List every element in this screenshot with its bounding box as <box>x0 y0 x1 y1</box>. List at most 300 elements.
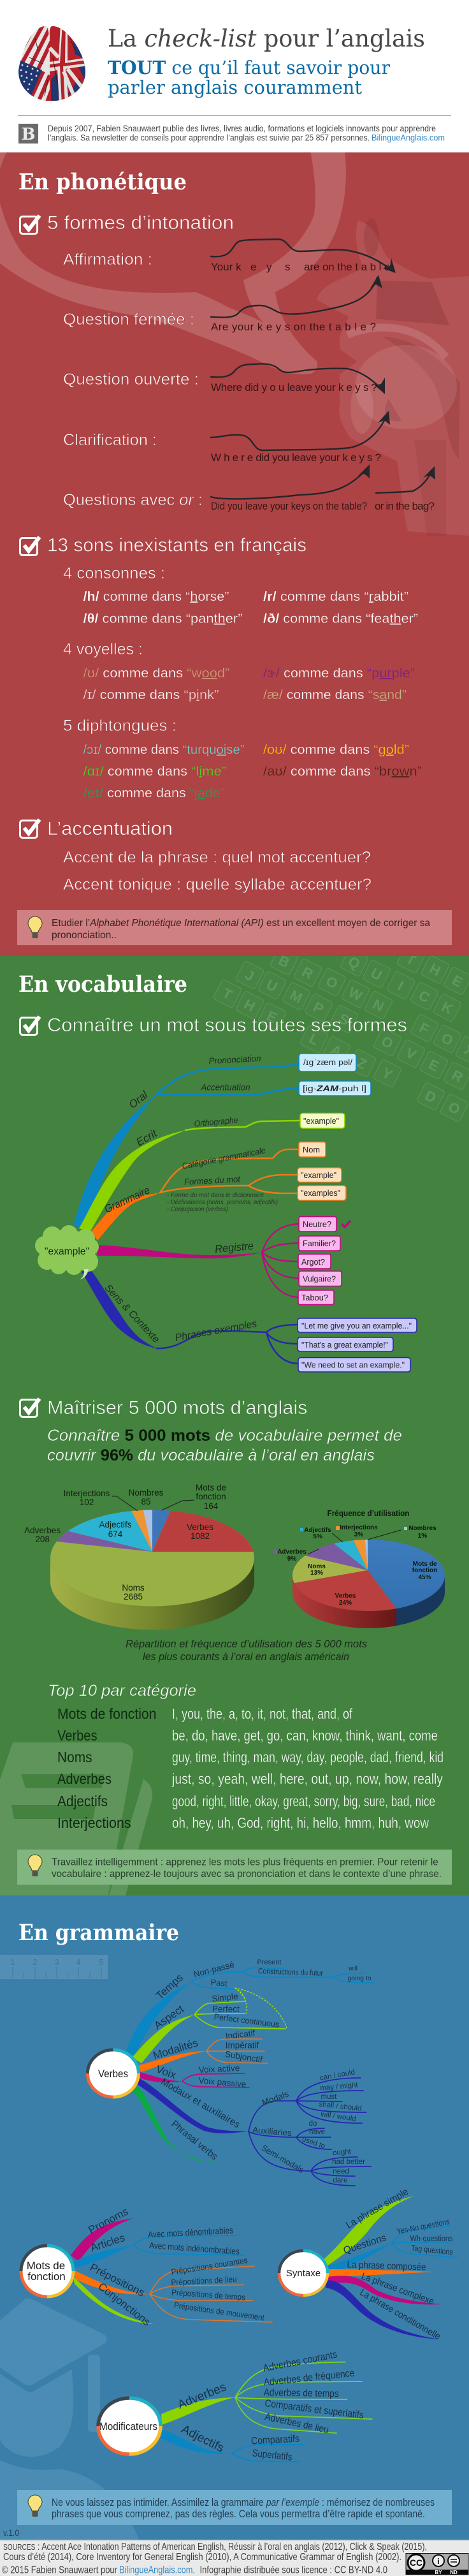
scrabble tiles watermark: L <box>307 1030 321 1049</box>
consonnes: /ð/ comme dans “fea ther” <box>263 612 418 626</box>
pie chart: word distribution: Verbes <box>187 1522 213 1532</box>
intonation: question ouverte <box>63 364 385 394</box>
node: Verbes <box>87 2050 138 2097</box>
pie chart: word distribution: 102 <box>80 1498 94 1507</box>
checklist item: sons inexistants: 13 sons inexistants en français <box>47 534 307 556</box>
node: Modificateurs: Modificateurs <box>99 2420 157 2432</box>
author blurb: BilingueAnglais.com <box>372 133 445 143</box>
branch: aspect: Perfect continuous <box>213 2012 280 2029</box>
pie chart: word distribution: Adverbes <box>24 1526 61 1535</box>
intonation: affirmation: s <box>285 261 291 273</box>
branch: modaux et auxiliaires: dare <box>333 2177 348 2184</box>
mind map: syntaxe <box>279 2186 458 2342</box>
icon: creative commons badge <box>406 2554 468 2575</box>
branch: registre: Registre <box>214 1240 254 1255</box>
pie chart: usage frequency: 3% <box>354 1531 363 1538</box>
branch: grammaire: Nom <box>303 1145 320 1154</box>
coverage statement: Connaître 5 000 mots de vocabulaire permet de <box>47 1427 402 1445</box>
voyelles: /ɝ/ comme dans “purple” <box>263 666 415 681</box>
branch: oral: [ig- ZAM -puh l] <box>303 1084 366 1093</box>
branch: sens et contexte <box>82 1269 417 1372</box>
voyelles: /ɪ/ comme dans “pink” <box>83 688 219 702</box>
consonnes: /h/ comme dans “ horse” <box>83 590 229 604</box>
ruler watermark <box>0 1955 108 1979</box>
scrabble tiles watermark: Q <box>345 953 363 972</box>
voyelles: /ʊ/ comme dans “wood” <box>83 666 229 681</box>
top 10 table: Noms <box>57 1749 92 1765</box>
mind map: syntaxe: La phrase conditionnelle <box>358 2287 442 2342</box>
pie chart: word distribution: Nombres <box>129 1488 164 1498</box>
branch: aspect: Perfect <box>212 2004 240 2014</box>
mind map: modificateurs: Superlatifs <box>252 2448 292 2463</box>
pie chart: word distribution <box>24 1484 254 1630</box>
mind map: syntaxe: Questions <box>342 2232 388 2256</box>
branch: modaux et auxiliaires: can / could <box>319 2068 356 2082</box>
intonation: affirmation: y <box>266 261 272 273</box>
scrabble tiles watermark: T <box>220 985 235 1003</box>
mind map: mots de fonction: Prépositions courantes <box>171 2255 249 2277</box>
scrabble tiles watermark: H <box>242 996 258 1015</box>
pie chart: word distribution: 164 <box>204 1501 219 1511</box>
mind map: modificateurs: Adverbes de lieu <box>264 2411 329 2436</box>
scrabble tiles watermark: J <box>243 967 257 984</box>
mind map: modificateurs: Adjectifs <box>179 2422 226 2455</box>
scrabble tiles watermark: C <box>416 987 433 1006</box>
pie chart: usage frequency: Adverbes <box>277 1549 307 1556</box>
top 10 table: Adverbes <box>57 1770 112 1787</box>
scrabble tiles watermark: D <box>422 1087 439 1106</box>
diphtongues: /eɪ/ comme dans “jade” <box>83 786 225 800</box>
scrabble tiles watermark: I <box>395 978 406 994</box>
top 10 table: I, you, the, a, to, it, not, that, and, of <box>172 1705 352 1722</box>
mind map: verbes <box>87 1959 374 2186</box>
speech bubble watermark <box>0 147 346 374</box>
icon: checkbox <box>20 216 40 233</box>
pie chart: word distribution: 208 <box>35 1535 50 1544</box>
top 10 heading: Top 10 par catégorie <box>48 1682 196 1700</box>
scrabble tiles watermark: U <box>368 965 385 983</box>
branch: voix: Voix active <box>198 2063 240 2075</box>
branch: modaux et auxiliaires: Modals <box>261 2089 290 2107</box>
chart caption: Répartition et fréquence d’utilisation des 5 000 mots <box>126 1638 367 1650</box>
ruler watermark: 2 <box>32 1957 38 1967</box>
mind map: modificateurs <box>98 2349 372 2463</box>
logo watermark bottom-left <box>0 1742 152 1895</box>
branch: oral: Prononciation <box>208 1054 261 1066</box>
mind map: modificateurs: Adverbes de fréquence <box>263 2368 355 2388</box>
branch: modaux et auxiliaires: Modaux et auxiliaires <box>159 2077 242 2130</box>
pie chart: word distribution: 85 <box>141 1497 151 1506</box>
mind map: word forms <box>35 1054 417 1372</box>
mind map: mots de fonction: Prépositions de temps <box>171 2287 246 2302</box>
icon: brain with American and British flags <box>18 26 85 101</box>
icon: creative commons badge: CC <box>410 2558 422 2568</box>
intonation: affirmation: are on the t a b l e. <box>304 261 393 273</box>
panel: vocabulaire <box>0 945 469 1895</box>
ruler watermark: 3 <box>54 1957 59 1967</box>
branch: voix: Voix passive <box>198 2075 247 2089</box>
scrabble tiles watermark: A <box>328 1041 345 1060</box>
branch: oral: Oral <box>126 1088 150 1111</box>
scrabble tiles watermark: O <box>438 1029 456 1049</box>
scrabble tiles watermark: T <box>403 950 419 969</box>
panel: grammaire <box>0 1895 469 2541</box>
branch: modalités: Modalités <box>152 2036 199 2062</box>
branch: registre: Neutre? <box>303 1219 331 1229</box>
callout: API tip: prononciation.. <box>52 930 117 941</box>
pie chart: word distribution: 2685 <box>124 1592 143 1601</box>
callout: vocabulary tip <box>17 1850 452 1885</box>
branch: registre: Familier? <box>303 1239 336 1248</box>
pie chart: usage frequency: Fréquence d’utilisation <box>328 1508 410 1518</box>
checklist item: accentuation: Accent de la phrase : quel mot accentuer? <box>63 848 371 866</box>
branch: sens et contexte: Sens & Contexte <box>103 1283 162 1345</box>
icon: light bulb <box>28 2495 42 2517</box>
branch: modaux et auxiliaires: Auxiliaries <box>252 2125 292 2138</box>
top 10 table: Verbes <box>57 1727 97 1744</box>
branch: registre: Tabou? <box>301 1293 328 1302</box>
heading: En grammaire <box>18 1920 179 1946</box>
branch: modalités <box>139 2028 268 2072</box>
mind map: mots de fonction: Prépositions de mouvement <box>173 2300 265 2322</box>
consonnes: /θ/ comme dans “pan ther” <box>83 612 242 626</box>
mind map: syntaxe: Yes-No questions <box>396 2217 451 2236</box>
branch: modaux et auxiliaires: ought <box>333 2148 352 2157</box>
mind map: syntaxe: La phrase composée <box>347 2259 426 2273</box>
scrabble tiles watermark: M <box>287 987 305 1006</box>
mind map: mots de fonction: Prépositions de lieu <box>171 2274 237 2287</box>
scrabble tiles watermark: E <box>426 1056 442 1075</box>
branch: registre: Argot? <box>301 1257 325 1267</box>
mind map: modificateurs: Adverbes courants <box>262 2349 338 2374</box>
checklist item: accentuation <box>20 818 372 894</box>
branch: voix <box>140 2063 249 2089</box>
branch: grammaire: Formes du mot <box>184 1174 242 1187</box>
pie chart: usage frequency: 13% <box>310 1570 323 1577</box>
diphtongues: /oʊ/ comme dans “gold” <box>263 743 409 757</box>
branch: grammaire: Catégorie grammaticale <box>181 1145 266 1171</box>
title: La check-list pour l’anglais <box>108 25 425 52</box>
intonation: question fermée <box>63 275 382 333</box>
branch: phrasal verbs <box>131 2087 220 2163</box>
mind map: syntaxe: Wh-questions <box>410 2234 452 2243</box>
scrabble tiles watermark: K <box>439 999 456 1017</box>
branch: modaux et auxiliaires: do <box>309 2120 317 2128</box>
branch: modaux et auxiliaires: will / would <box>320 2110 356 2123</box>
central cloud node <box>35 1225 99 1279</box>
pie chart: word distribution: 674 <box>108 1529 123 1539</box>
pie chart: word distribution: fonction <box>196 1492 226 1501</box>
icon: Bilingue logo: B <box>22 125 35 144</box>
checklist item: 5000 mots: Maîtriser 5 000 mots d’anglais <box>47 1397 307 1418</box>
branch: aspect: Aspect <box>152 2003 186 2032</box>
scrabble tiles watermark: N <box>370 996 387 1015</box>
branch: sens et contexte: "That's a great example!" <box>301 1340 388 1350</box>
coverage statement <box>47 1427 402 1464</box>
voyelles: /æ/ comme dans “sand” <box>263 688 407 702</box>
intonation: questions avec or: or in the bag? <box>375 500 435 512</box>
scrabble tiles watermark: Z <box>354 1054 369 1073</box>
icon: light bulb <box>28 1855 42 1876</box>
intonation: questions avec or: Did you leave your keys on the table? <box>211 500 367 512</box>
node: Verbes: Verbes <box>98 2068 128 2080</box>
branch: aspect: Simple <box>212 1991 238 2004</box>
branch: temps: going to <box>347 1975 372 1982</box>
scrabble tiles watermark: V <box>403 1045 419 1063</box>
sources: Infographie distribuée sous licence : CC BY-ND 4.0 <box>200 2565 387 2575</box>
pie chart: usage frequency <box>273 1510 445 1628</box>
icon: light bulb <box>28 916 42 938</box>
pie chart: usage frequency: 45% <box>418 1574 431 1581</box>
anatomy watermark: head cross-section <box>317 218 469 536</box>
pie chart: usage frequency: 9% <box>287 1556 296 1563</box>
scrabble tiles watermark: E <box>264 1008 280 1026</box>
branch: modaux et auxiliaires: Semi-modals <box>260 2143 305 2175</box>
branch: sens et contexte: "We need to set an example." <box>301 1360 405 1370</box>
diphtongues: /ɑɪ/ comme dans “lime” <box>83 765 226 779</box>
mind map: mots de fonction: Avec mots indénombrables <box>149 2240 240 2256</box>
branch: grammaire: Grammaire <box>103 1184 152 1216</box>
intonation: affirmation <box>63 239 396 273</box>
pie chart: word distribution: 1082 <box>191 1531 210 1541</box>
node: Syntaxe <box>279 2251 328 2295</box>
scrabble tiles watermark: B <box>276 952 292 971</box>
icon: creative commons badge: i <box>437 2557 440 2566</box>
header panel <box>18 26 451 144</box>
intonation: questions avec or: Questions avec or : <box>63 491 203 509</box>
branch: temps <box>126 1959 374 2056</box>
footer <box>0 2540 469 2576</box>
diphtongues <box>63 717 422 800</box>
author blurb: l’anglais. Sa newsletter de conseils pour apprendre l’anglais est suivie par 25 857 personnes. <box>48 133 370 143</box>
node: Mots de fonction: Mots de <box>27 2260 65 2272</box>
branch: sens et contexte: "Let me give you an example..." <box>301 1321 412 1330</box>
branch: grammaire: "examples" <box>301 1188 340 1198</box>
branch: écrit <box>79 1114 345 1232</box>
mind map: syntaxe: La phrase simple <box>344 2186 410 2231</box>
central cloud node: "example" <box>45 1246 89 1257</box>
callout: grammar tip: Ne vous laissez pas intimider. Assimilez la grammaire par l’exemple : mémorisez de nombreuses <box>52 2496 435 2508</box>
panel: phonétique <box>0 147 469 956</box>
icon: creative commons badge: ND <box>450 2570 458 2575</box>
callout: API tip: Etudier l’Alphabet Phonétique International (API) est un excellent moyen de corriger sa <box>52 918 430 929</box>
scrabble tiles watermark: U <box>264 976 280 995</box>
scrabble tiles watermark: F <box>417 1019 431 1038</box>
branch: voix: Voix <box>154 2063 178 2082</box>
branch: modaux et auxiliaires: shall / should <box>319 2101 362 2112</box>
branch: oral: /ɪɡˈzæm pəl/ <box>303 1057 352 1067</box>
scrabble tiles watermark: Y <box>380 1064 395 1083</box>
branch: temps: Temps <box>154 1971 185 2002</box>
mind map: mots de fonction: Prépositions <box>88 2261 147 2299</box>
branch: modaux et auxiliaires: have <box>309 2128 325 2136</box>
branch: modaux et auxiliaires: had better <box>332 2158 365 2166</box>
pie chart: usage frequency: 24% <box>339 1600 352 1607</box>
mind map: syntaxe: Tag questions <box>410 2244 454 2256</box>
ruler watermark: 5 <box>99 1957 104 1967</box>
callout: vocabulary tip: Travaillez intelligemment : apprenez les mots les plus fréquents en premier. Pour retenir le <box>52 1857 438 1867</box>
scrabble tiles watermark: R <box>449 1067 466 1086</box>
scrabble tiles watermark: R <box>299 964 316 982</box>
subtitle: TOUT ce qu’il faut savoir pour <box>108 57 390 78</box>
mind map: syntaxe: La phrase complexe <box>360 2271 435 2307</box>
branch: grammaire <box>91 1142 346 1240</box>
checklist item: intonation: 5 formes d’intonation <box>47 212 234 233</box>
branch: aspect <box>132 1988 287 2063</box>
intonation: affirmation: Affirmation : <box>63 251 152 269</box>
chart caption <box>126 1638 367 1663</box>
scrabble tiles watermark: O <box>323 973 340 992</box>
icon: checkbox <box>20 1017 40 1034</box>
scrabble tiles watermark: W <box>346 984 365 1004</box>
pie chart: usage frequency: Mots de <box>413 1561 437 1568</box>
pie chart: usage frequency: Adjectifs <box>304 1527 331 1534</box>
author blurb <box>48 124 445 143</box>
intonation: question ouverte: Where did y o u leave your k e y s ? <box>211 381 377 394</box>
version: v.1.0 <box>3 2528 19 2538</box>
mind map: modificateurs: Comparatifs et superlatifs <box>264 2398 364 2421</box>
branch: modaux et auxiliaires: need <box>333 2168 349 2175</box>
mind map: modificateurs: Adverbes <box>176 2380 228 2412</box>
graduate watermark <box>0 2299 139 2540</box>
branch: modaux et auxiliaires: used to <box>301 2135 326 2151</box>
branch: modalités: Indicatif <box>225 2028 256 2041</box>
mind map: modificateurs: Comparatifs <box>251 2434 299 2447</box>
consonnes: 4 consonnes : <box>63 564 165 582</box>
pie chart: usage frequency: Verbes <box>335 1593 356 1600</box>
callout: vocabulary tip: vocabulaire : apprenez-le toujours avec sa prononciation et dans le contexte d’une phrase. <box>52 1869 442 1880</box>
pie chart: word distribution: Mots de <box>196 1483 226 1492</box>
voyelles <box>63 640 415 702</box>
diphtongues: /ɔɪ/ comme dans “turquoise” <box>83 743 244 757</box>
chart caption: les plus courants à l’oral en anglais américain <box>143 1651 349 1663</box>
branch: grammaire: - Déclinaisons (noms, pronoms, adjectifs) <box>167 1198 278 1206</box>
mind map: mots de fonction: Conjonctions <box>96 2280 153 2329</box>
pie chart: usage frequency: Nombres <box>408 1525 437 1532</box>
top 10 table: Adjectifs <box>57 1793 108 1809</box>
mind map: mots de fonction: Pronoms <box>87 2205 130 2236</box>
mind map: mots de fonction <box>21 2205 272 2329</box>
intonation: question ouverte: Question ouverte : <box>63 371 199 388</box>
intonation: affirmation: e <box>250 261 256 273</box>
pie chart: usage frequency: 5% <box>313 1533 322 1540</box>
scrabble tiles watermark: O <box>379 1033 396 1052</box>
icon: checkbox <box>20 1399 40 1417</box>
scrabble tiles watermark <box>213 945 469 1122</box>
branch: oral <box>73 1054 371 1228</box>
intonation: affirmation: Your k <box>211 261 242 273</box>
sources: BilingueAnglais.com. <box>119 2565 195 2575</box>
voyelles: 4 voyelles : <box>63 640 143 658</box>
scrabble tiles watermark: O <box>445 1098 463 1117</box>
header panel: parler anglais couramment <box>108 77 362 98</box>
branch: phrasal verbs: Phrasal verbs <box>169 2119 220 2162</box>
node: Modificateurs <box>98 2398 161 2454</box>
branch: oral: Accentuation <box>201 1083 250 1092</box>
pie chart: word distribution: Interjections <box>64 1489 110 1498</box>
branch: grammaire: - Conjugaison (verbes) <box>167 1205 228 1213</box>
scrabble tiles watermark: E <box>450 972 465 990</box>
ruler watermark: 4 <box>76 1957 81 1967</box>
branch: grammaire: "example" <box>301 1170 336 1180</box>
consonnes <box>63 564 418 626</box>
intonation: questions avec or <box>63 464 435 512</box>
branch: modaux et auxiliaires <box>137 2068 371 2186</box>
checklist item: accentuation: Accent tonique : quelle syllabe accentuer? <box>63 876 372 894</box>
node: Syntaxe: Syntaxe <box>286 2268 321 2279</box>
node: Mots de fonction: fonction <box>27 2271 66 2283</box>
branch: écrit: "example" <box>303 1116 339 1126</box>
branch: temps: Constructions du futur <box>258 1966 323 1978</box>
diphtongues: /aʊ/ comme dans “brown” <box>263 765 422 779</box>
pie chart: word distribution: Adjectifs <box>99 1520 132 1529</box>
icon: checkbox <box>20 820 40 838</box>
branch: registre <box>97 1217 350 1305</box>
pie chart: usage frequency: Interjections <box>340 1524 378 1531</box>
coverage statement: couvrir 96% du vocabulaire à l’oral en anglais <box>47 1446 375 1464</box>
checklist item: connaître un mot: Connaître un mot sous toutes ses formes <box>47 1015 407 1036</box>
pie chart: word distribution: Noms <box>122 1583 145 1593</box>
scrabble tiles watermark: H <box>427 960 444 979</box>
node: Mots de fonction <box>21 2246 73 2297</box>
pie chart: usage frequency: Noms <box>308 1563 326 1570</box>
branch: sens et contexte: Phrases exemples <box>175 1318 257 1344</box>
icon: checkbox <box>20 537 40 555</box>
heading: En vocabulaire <box>18 971 187 997</box>
branch: temps: Past <box>210 1977 228 1989</box>
top 10 table <box>57 1705 444 1831</box>
branch: registre: Vulgaire? <box>303 1274 336 1283</box>
sources: © 2015 Fabien Snauwaert pour <box>2 2565 118 2575</box>
pie chart: usage frequency: fonction <box>412 1567 437 1574</box>
icon: Bilingue logo <box>18 124 38 144</box>
mind map: mots de fonction: Avec mots dénombrables <box>148 2225 233 2239</box>
intonation: question fermée: Are your k e y s on the t a b l e ? <box>211 321 376 333</box>
branch: temps: Non-passé <box>192 1960 235 1979</box>
intonation: question fermée: Question fermée : <box>63 311 194 328</box>
mind map: mots de fonction: Articles <box>89 2232 126 2254</box>
branch: écrit: Orthographe <box>194 1115 238 1128</box>
branch: modalités: Impératif <box>226 2041 259 2050</box>
branch: modaux et auxiliaires: may / might <box>320 2081 359 2093</box>
scrabble tiles watermark: S <box>336 1010 352 1029</box>
branch: modalités: Subjonctif <box>224 2049 263 2064</box>
author blurb: Depuis 2007, Fabien Snauwaert publie des livres, livres audio, formations et logiciels innovants pour apprendre <box>48 124 436 133</box>
intonation: clarification <box>63 411 390 464</box>
branch: temps: Present <box>257 1959 281 1966</box>
consonnes: /r/ comme dans “ rabbit” <box>263 590 408 604</box>
callout: grammar tip <box>17 2490 452 2525</box>
branch: temps: will <box>348 1966 357 1972</box>
intonation: clarification: Clarification : <box>63 431 157 449</box>
heading: En phonétique <box>18 169 187 195</box>
ruler watermark: 1 <box>10 1957 15 1967</box>
intonation: clarification: W h e r e did you leave your k e y s ? <box>211 452 381 464</box>
sources <box>2 2542 427 2575</box>
scrabble tiles watermark: P <box>311 999 326 1017</box>
branch: grammaire: - Forme du mot dans le dictionnaire <box>167 1191 264 1199</box>
branch: écrit: Ecrit <box>134 1127 160 1149</box>
checklist item: accentuation: L’accentuation <box>47 818 173 839</box>
callout: API tip <box>17 910 452 945</box>
top 10 table: Mots de fonction <box>57 1705 157 1722</box>
diphtongues: 5 diphtongues : <box>63 717 177 735</box>
mind map: modificateurs: Adverbes de temps <box>264 2387 339 2399</box>
top 10 table: Interjections <box>57 1814 131 1831</box>
pie chart: usage frequency: 1% <box>418 1533 427 1540</box>
icon: creative commons badge: BY <box>435 2570 442 2575</box>
branch: modaux et auxiliaires: must <box>321 2093 337 2101</box>
